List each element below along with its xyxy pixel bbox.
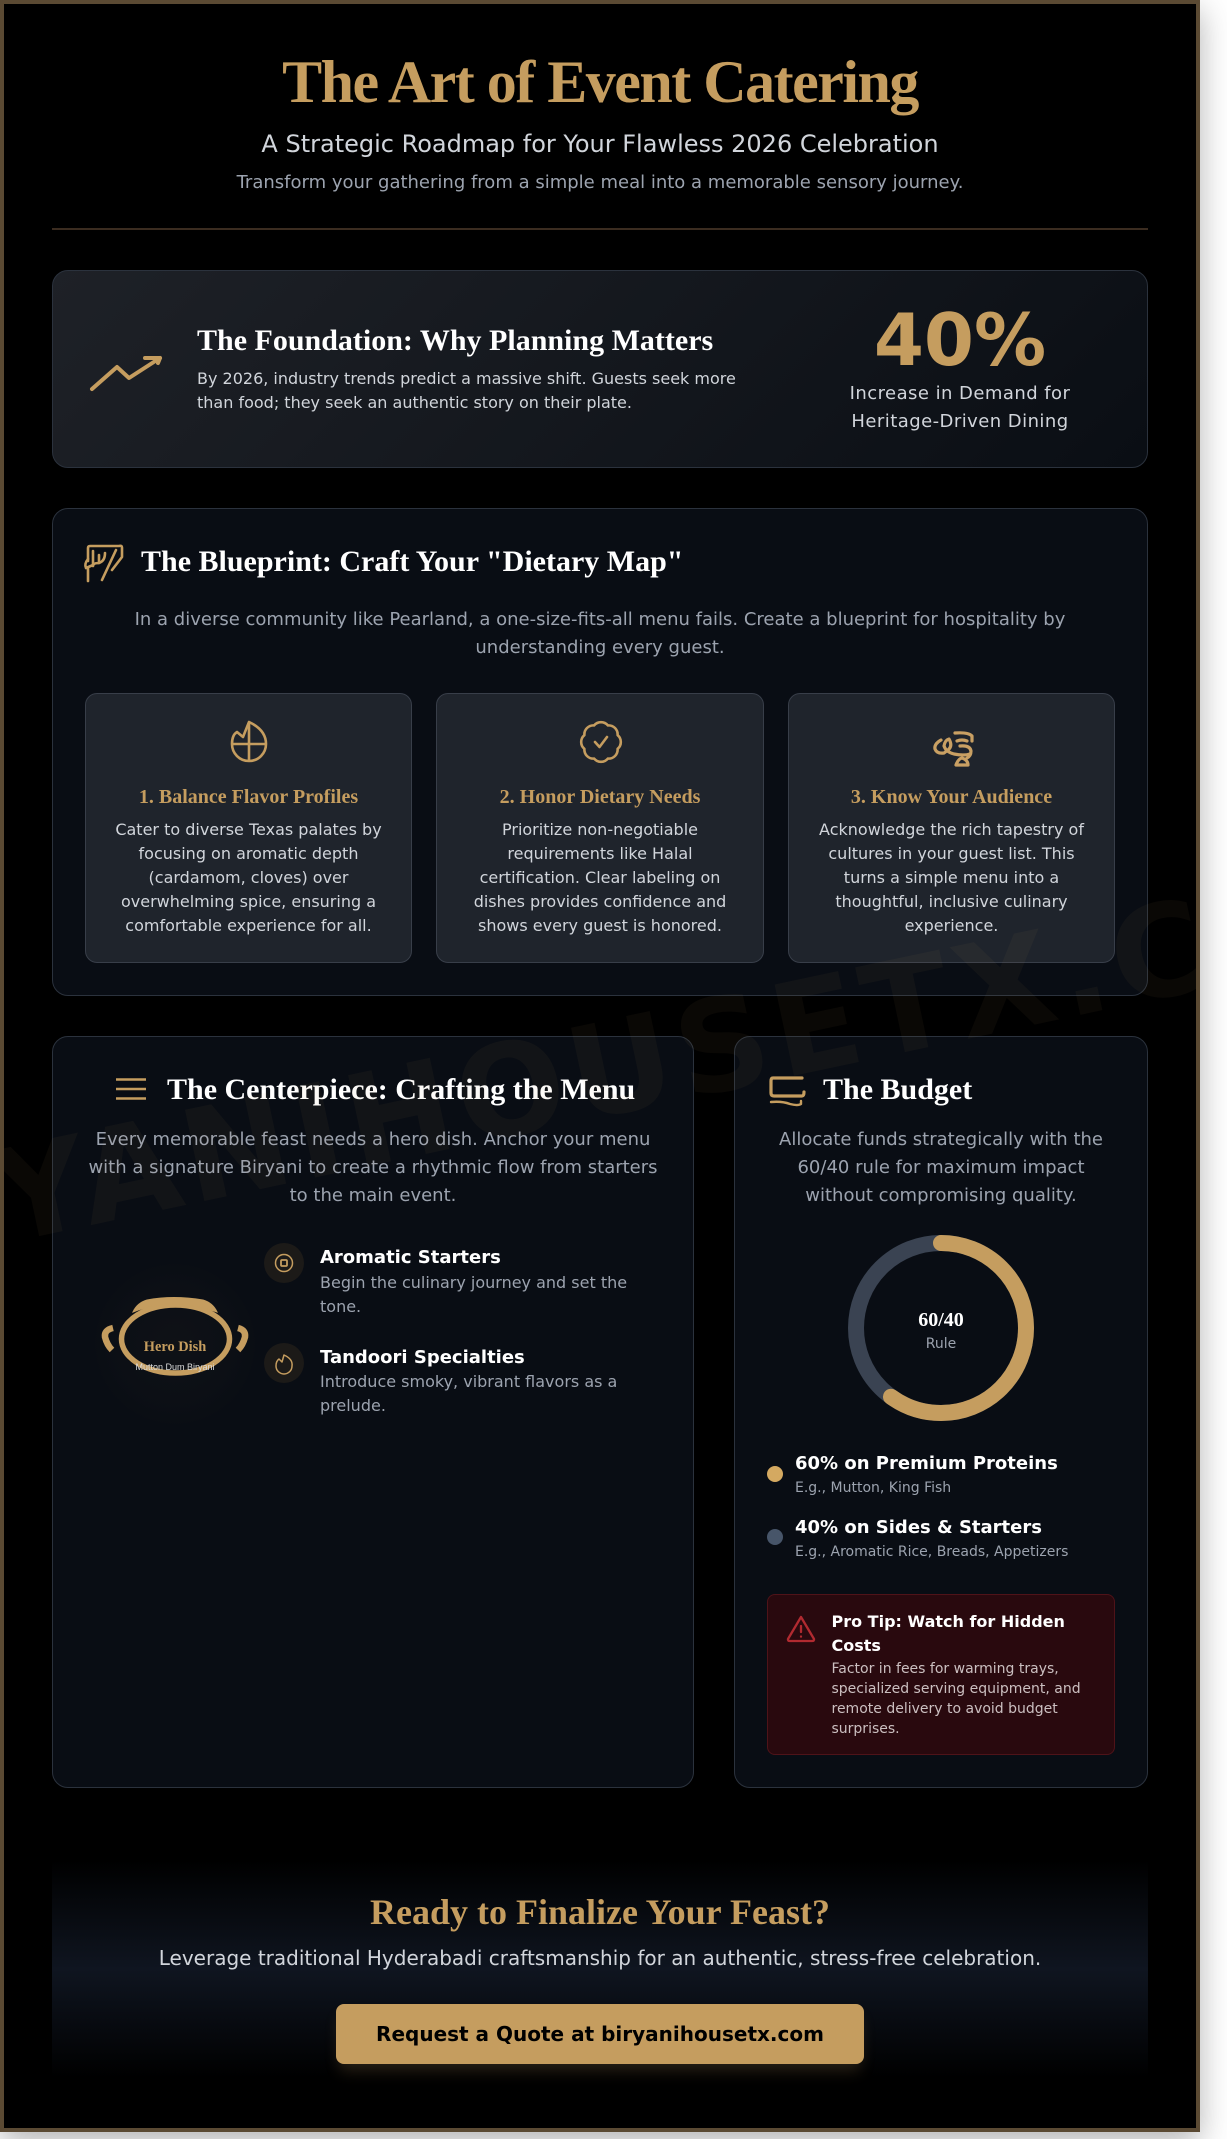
card: flavor — [85, 693, 412, 963]
icon: map — [84, 544, 124, 582]
text: comfortable experience for all. — [125, 916, 372, 935]
heading: Ready to Finalize Your Feast? — [370, 1892, 830, 1932]
icon: menu — [116, 1078, 146, 1100]
panel: blueprint — [52, 508, 1148, 996]
text: Leverage traditional Hyderabadi craftsmanship for an authentic, stress-free celebration. — [159, 1946, 1041, 1970]
title: Tandoori Specialties — [320, 1346, 525, 1368]
title — [832, 1612, 1065, 1655]
text: focusing on aromatic depth — [139, 844, 358, 863]
stat: 40%: 40% — [874, 298, 1046, 382]
hero dish graphic — [93, 1262, 257, 1426]
text: overwhelming spice, ensuring a — [121, 892, 376, 911]
intro: understanding every guest. — [475, 636, 725, 658]
panel: foundation — [52, 270, 1148, 468]
title: Pro Tip: Watch for Hidden — [832, 1612, 1065, 1631]
text: Cater to diverse Texas palates by — [115, 820, 382, 839]
text: specialized serving equipment, and — [832, 1681, 1081, 1697]
title: 1. Balance Flavor Profiles — [139, 786, 358, 808]
text: prelude. — [320, 1396, 386, 1415]
intro: Allocate funds strategically with the — [779, 1129, 1103, 1150]
text: thoughtful, inclusive culinary — [835, 892, 1068, 911]
stat label: Heritage-Driven Dining — [851, 411, 1069, 432]
sub label: Mutton Dum Biryani — [135, 1362, 215, 1372]
icon: trending up — [90, 356, 162, 392]
text: requirements like Halal — [507, 844, 693, 863]
intro — [779, 1129, 1103, 1206]
intro — [88, 1129, 658, 1206]
text: E.g., Mutton, King Fish — [795, 1480, 951, 1496]
stat label — [850, 383, 1070, 432]
title: Aromatic Starters — [320, 1247, 501, 1268]
description — [197, 369, 736, 412]
text — [320, 1372, 617, 1415]
callout: pro tip — [767, 1594, 1115, 1755]
intro: 60/40 rule for maximum impact — [797, 1157, 1085, 1178]
title: The Art of Event Catering — [282, 49, 918, 115]
intro — [135, 608, 1065, 658]
text — [320, 1272, 627, 1316]
pot illustration — [102, 1297, 248, 1376]
label: Hero Dish — [144, 1339, 206, 1355]
text: Factor in fees for warming trays, — [832, 1661, 1059, 1677]
header — [236, 49, 963, 193]
text: remote delivery to avoid budget — [832, 1701, 1058, 1717]
card: dietary — [436, 693, 764, 963]
text: (cardamom, cloves) over — [149, 868, 348, 887]
tagline: Transform your gathering from a simple meal into a memorable sensory journey. — [237, 172, 963, 193]
value: 60/40 — [918, 1309, 964, 1331]
title: 60% on Premium Proteins — [795, 1453, 1058, 1474]
stat label: Increase in Demand for — [850, 383, 1070, 404]
text: turns a simple menu into a — [844, 868, 1059, 887]
donut chart — [848, 1235, 1034, 1421]
icon: starters — [264, 1243, 304, 1283]
text: dishes provides confidence and — [474, 892, 726, 911]
description: than food; they seek an authentic story on their plate. — [197, 393, 632, 412]
text: tone. — [320, 1296, 361, 1316]
panel: budget — [734, 1036, 1148, 1788]
heading: The Centerpiece: Crafting the Menu — [167, 1072, 635, 1106]
text: Introduce smoky, vibrant flavors as a — [320, 1372, 617, 1391]
button — [336, 2004, 864, 2064]
text: shows every guest is honored. — [478, 916, 722, 935]
text: certification. Clear labeling on — [480, 868, 720, 887]
intro: without compromising quality. — [805, 1185, 1077, 1206]
intro: Every memorable feast needs a hero dish. Anchor your menu — [96, 1129, 650, 1150]
button: Request a Quote at biryanihousetx.com — [376, 2022, 824, 2046]
legend: sides — [767, 1517, 1068, 1560]
intro: to the main event. — [290, 1185, 456, 1206]
item: tandoori — [264, 1343, 617, 1415]
icon: audience — [933, 731, 974, 767]
text: E.g., Aromatic Rice, Breads, Appetizers — [795, 1544, 1068, 1560]
title: 40% on Sides & Starters — [795, 1517, 1042, 1538]
subtitle: A Strategic Roadmap for Your Flawless 2026 Celebration — [261, 130, 939, 158]
heading: The Blueprint: Craft Your "Dietary Map" — [141, 544, 683, 578]
text: cultures in your guest list. This — [828, 844, 1075, 863]
legend: proteins — [767, 1453, 1058, 1496]
intro: In a diverse community like Pearland, a one-size-fits-all menu fails. Create a blueprint for hospitality by — [135, 608, 1065, 630]
intro: with a signature Biryani to create a rhythmic flow from starters — [88, 1157, 658, 1178]
text: experience. — [905, 916, 998, 935]
heading: The Foundation: Why Planning Matters — [197, 324, 713, 357]
marker — [767, 1466, 783, 1482]
call to action — [52, 1860, 1148, 2078]
item: starters — [264, 1243, 627, 1316]
text: Begin the culinary journey and set the — [320, 1272, 627, 1292]
title: Costs — [832, 1636, 881, 1655]
text: surprises. — [832, 1721, 900, 1737]
text — [474, 820, 726, 935]
title: 3. Know Your Audience — [851, 786, 1052, 808]
donut label — [918, 1309, 964, 1352]
icon: tandoori — [264, 1343, 304, 1383]
icon: badge check — [580, 720, 622, 764]
icon: warning — [786, 1616, 816, 1642]
icon: wallet — [769, 1076, 806, 1106]
text — [819, 820, 1084, 935]
heading: The Budget — [823, 1072, 972, 1106]
card: audience — [788, 693, 1115, 963]
marker — [767, 1529, 783, 1545]
text: Prioritize non-negotiable — [502, 820, 698, 839]
text — [115, 820, 382, 935]
text: Acknowledge the rich tapestry of — [819, 820, 1084, 839]
description: By 2026, industry trends predict a massive shift. Guests seek more — [197, 369, 736, 388]
panel: centerpiece — [52, 1036, 694, 1788]
title: 2. Honor Dietary Needs — [500, 786, 700, 808]
caption: Rule — [926, 1336, 956, 1352]
text — [832, 1661, 1081, 1737]
icon: flavor — [230, 720, 268, 762]
